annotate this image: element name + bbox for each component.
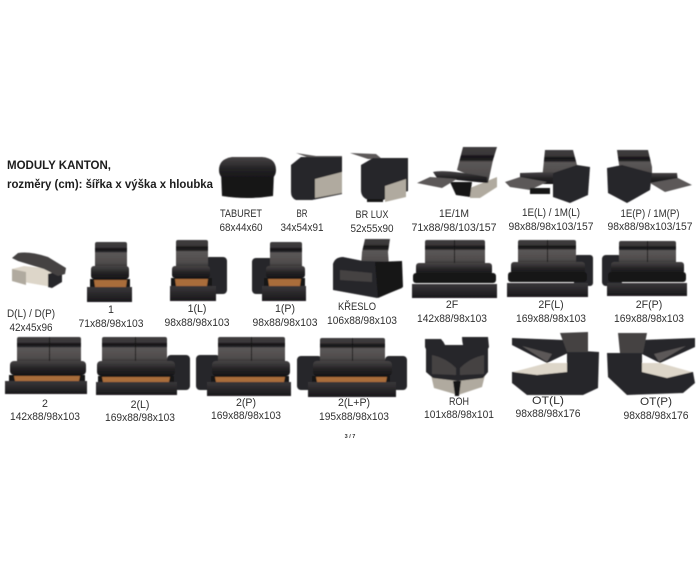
module: OT(L): 98x88/98x176	[516, 408, 581, 420]
module: taburet: 68x44x60	[220, 222, 263, 234]
module: ROH: 101x88/98x101	[424, 409, 494, 421]
module: 1	[78, 242, 144, 330]
icon: ROH	[425, 337, 489, 396]
module: 1(P)	[252, 242, 318, 329]
title	[7, 158, 213, 191]
module: BR	[280, 153, 342, 234]
icon: taburet	[219, 157, 276, 198]
module: 2F(L): 169x88/98x103	[516, 313, 586, 325]
icon: 2(L+P)	[297, 338, 407, 397]
module: 1E(P) / 1M(P): 1E(P) / 1M(P)	[620, 208, 680, 220]
module: 2F(P)	[602, 241, 687, 325]
module: D(L) / D(P)	[7, 252, 66, 334]
icon: 1E(L)	[505, 150, 590, 203]
module: 2: 2	[42, 398, 48, 410]
icon: BR	[291, 153, 342, 200]
module: 2(L+P)	[297, 338, 407, 423]
icon: BR LUX	[350, 153, 408, 202]
module: BR LUX	[350, 153, 408, 235]
module: 1E(P) / 1M(P): 98x88/98x103/157	[608, 221, 693, 233]
module: 2(P): 2(P)	[236, 397, 256, 409]
page number: 3 / 7	[345, 434, 355, 440]
icon: 1	[87, 242, 132, 302]
module: 1: 71x88/98x103	[78, 318, 144, 330]
module: ROH: ROH	[449, 396, 469, 408]
icon: 1E(P)	[607, 150, 692, 203]
module: taburet: TABURET	[220, 208, 262, 220]
module: 2F(L)	[507, 240, 593, 325]
module: 2(L): 169x88/98x103	[105, 412, 175, 424]
icon: 2F(P)	[602, 241, 687, 296]
module: 1E(L) / 1M(L): 98x88/98x103/157	[508, 221, 594, 233]
module: 1E(L) / 1M(L): 1E(L) / 1M(L)	[522, 207, 580, 219]
module: 1(P): 1(P)	[275, 303, 295, 315]
icon: 1(L)	[170, 240, 227, 301]
module: 1E(P) / 1M(P)	[607, 150, 693, 233]
module: 2(L): 2(L)	[131, 399, 149, 411]
module: KŘESLO: KŘESLO	[338, 300, 376, 313]
module: 1E/1M: 71x88/98/103/157	[412, 222, 497, 234]
icon: 2F	[412, 240, 497, 298]
module: 2: 142x88/98x103	[10, 411, 80, 423]
module: 2(L+P): 2(L+P)	[338, 397, 370, 409]
icon: 1(P)	[252, 242, 306, 301]
icon: 1E/1M	[417, 147, 497, 198]
module: BR: BR	[296, 208, 308, 220]
icon: 2(L)	[96, 337, 190, 395]
icon: 2	[5, 337, 87, 394]
module: BR LUX: 52x55x90	[350, 223, 394, 235]
module: 1(L): 1(L)	[188, 303, 206, 315]
module: 1E/1M	[412, 147, 497, 234]
title: rozměry (cm): šířka x výška x hloubka	[7, 177, 213, 191]
module: 1: 1	[108, 304, 114, 316]
module: 2(L+P): 195x88/98x103	[319, 411, 389, 423]
module: 2	[5, 337, 87, 423]
module: BR LUX: BR LUX	[356, 209, 388, 221]
module: 2F: 2F	[446, 299, 459, 311]
module: OT(P): 98x88/98x176	[624, 410, 689, 422]
icon: 2(P)	[196, 337, 291, 396]
module: KŘESLO: 106x88/98x103	[327, 315, 397, 327]
module: 2F(L): 2F(L)	[538, 299, 564, 311]
module: ROH	[424, 337, 494, 421]
title: MODULY KANTON,	[7, 158, 111, 172]
module: OT(L): OT(L)	[532, 395, 564, 407]
module: 1(L)	[164, 240, 230, 329]
module: 2F(P): 2F(P)	[636, 299, 662, 311]
module: 2(L)	[96, 337, 190, 424]
icon: OT(L)	[512, 332, 599, 395]
icon: 2F(L)	[507, 240, 593, 297]
module: 1(P): 98x88/98x103	[252, 317, 318, 329]
module: 1E(L) / 1M(L)	[505, 150, 594, 233]
module: BR: 34x54x91	[280, 222, 324, 234]
module: 2F(P): 169x88/98x103	[614, 313, 684, 325]
module: OT(P): OT(P)	[640, 396, 672, 408]
module: D(L) / D(P): D(L) / D(P)	[7, 308, 55, 320]
module: 1(L): 98x88/98x103	[164, 317, 230, 329]
module: taburet	[219, 157, 276, 234]
icon: D	[12, 252, 66, 288]
module: 2F	[412, 240, 497, 325]
icon: OT(P)	[607, 333, 695, 395]
module: KŘESLO	[327, 239, 403, 327]
module: 2F: 142x88/98x103	[417, 313, 487, 325]
module: 1E/1M: 1E/1M	[439, 208, 469, 220]
module: D(L) / D(P): 42x45x96	[10, 322, 53, 334]
module: 2(P): 169x88/98x103	[211, 410, 281, 422]
icon: KŘESLO	[333, 239, 403, 298]
module: 2(P)	[196, 337, 291, 422]
module: OT(L)	[512, 332, 599, 420]
module: OT(P)	[607, 333, 695, 422]
